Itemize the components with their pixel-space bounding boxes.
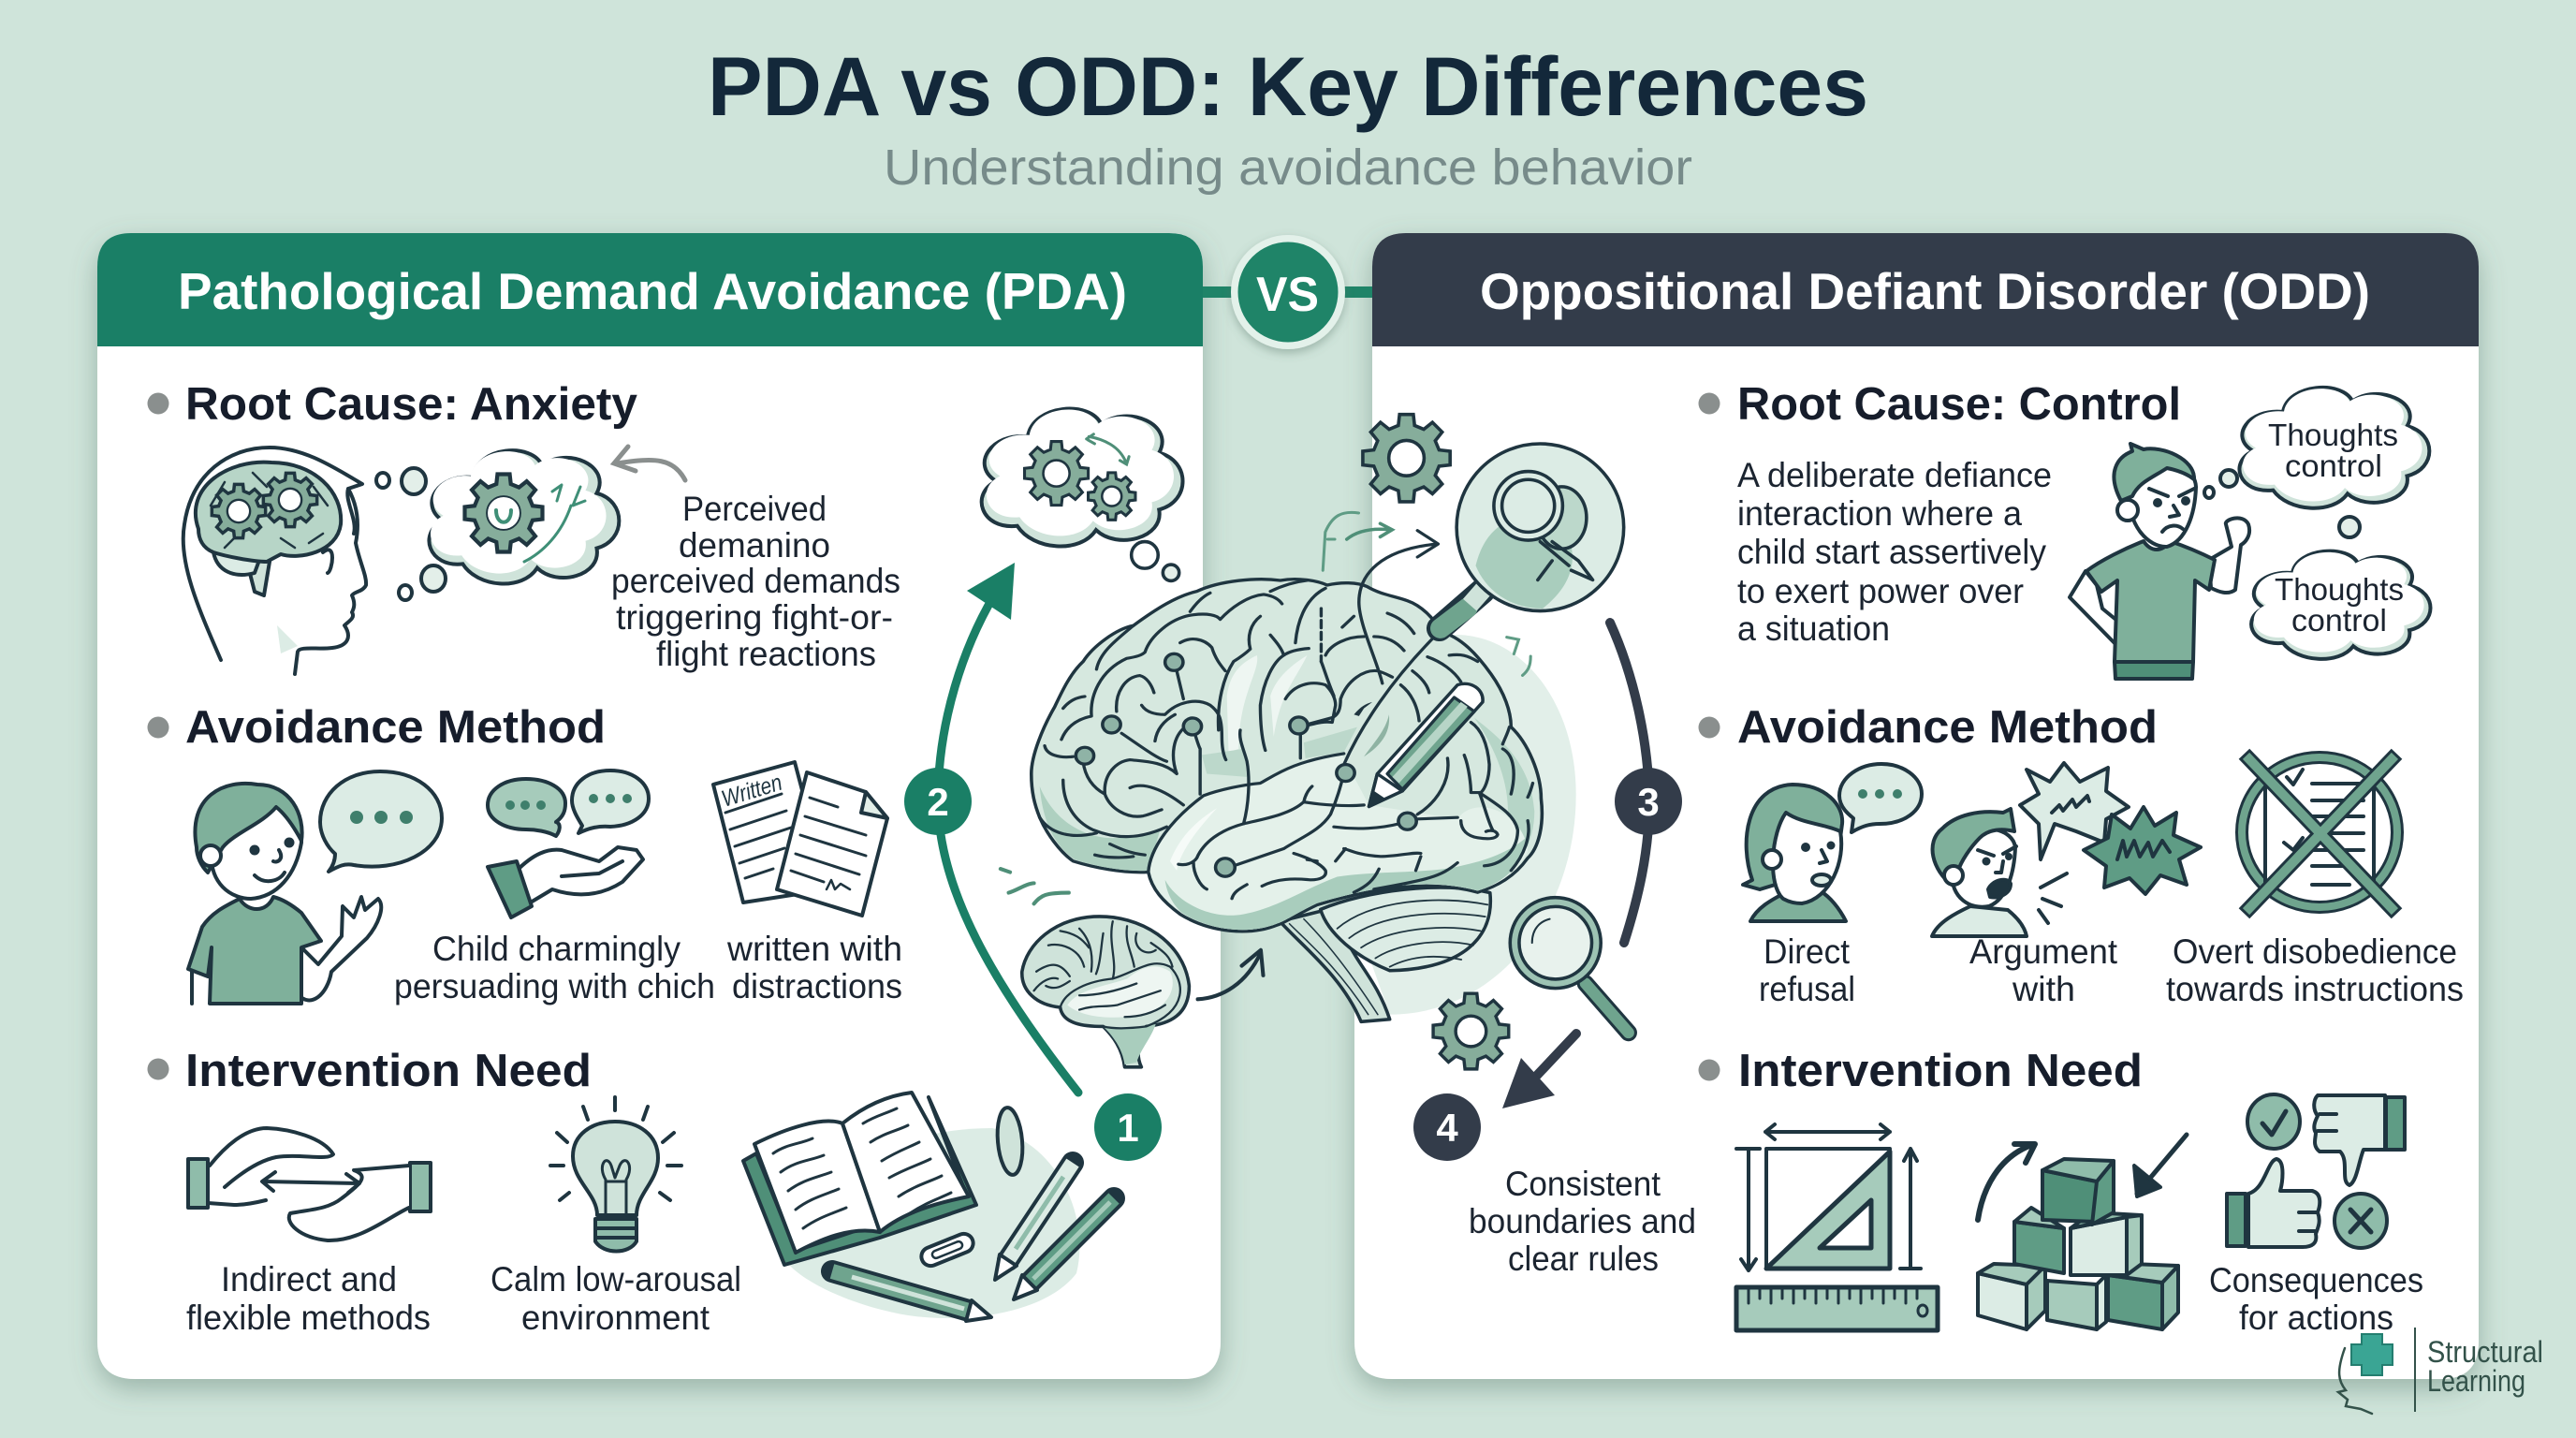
text: consistent boundaries: clear rules bbox=[1508, 1240, 1659, 1278]
text: consistent boundaries: boundaries and bbox=[1469, 1202, 1696, 1240]
text: perceived demands: perceived demands bbox=[611, 562, 900, 600]
text: perceived demands bbox=[611, 490, 900, 673]
text: perceived demands: demanino bbox=[679, 526, 830, 565]
step 4 badge bbox=[1413, 1093, 1481, 1161]
heading: avoidance method: Avoidance Method bbox=[185, 702, 606, 753]
text: deliberate defiance: A deliberate defiance bbox=[1737, 456, 2052, 494]
icon: thought cloud control top bbox=[2204, 388, 2429, 508]
text: perceived demands: triggering fight-or- bbox=[616, 598, 893, 637]
text: child charmingly persuading: persuading with chich bbox=[394, 967, 715, 1005]
step 2 badge: 2 bbox=[927, 780, 949, 824]
large magnifier bbox=[1435, 444, 1624, 628]
text: consequences for actions: for actions bbox=[2239, 1299, 2393, 1337]
icon: thought cloud control bottom: Thoughts bbox=[2275, 572, 2404, 607]
text: calm low-arousal bbox=[490, 1260, 741, 1337]
icon: angry boy with fist bbox=[2070, 444, 2249, 679]
small magnifier bbox=[1510, 898, 1629, 1033]
heading: intervention need ODD: Intervention Need bbox=[1738, 1046, 2143, 1096]
pale blob bbox=[1366, 635, 1576, 1015]
VS connector lines bbox=[1203, 286, 1372, 298]
text: written with distractions bbox=[726, 930, 902, 1005]
icon: set square and ruler bbox=[1736, 1124, 1938, 1330]
text: perceived demands: flight reactions bbox=[656, 635, 876, 673]
icon: head with brain gears bbox=[183, 448, 366, 674]
icon: smiling child bbox=[188, 784, 381, 1004]
text: consequences for actions: Consequences bbox=[2209, 1261, 2423, 1299]
text: deliberate defiance: interaction where a bbox=[1737, 494, 2022, 533]
heading: root cause anxiety: Root Cause: Anxiety bbox=[185, 379, 637, 430]
text: deliberate defiance: child start assertively bbox=[1737, 533, 2046, 571]
icon: light bulb bbox=[550, 1097, 681, 1251]
arrow: green arc 1 to 2 bbox=[938, 563, 1078, 1093]
central brain illustration bbox=[982, 409, 1629, 1069]
text: indirect and flexible bbox=[186, 1260, 431, 1337]
text: child charmingly persuading: Child charmingly bbox=[432, 930, 681, 968]
icon: thought cloud control bottom bbox=[2251, 517, 2430, 659]
icon: open book with pencils bbox=[743, 1093, 1114, 1321]
icon: written papers: Written bbox=[719, 770, 785, 813]
text: written with distractions: written with bbox=[726, 930, 902, 968]
text: argument with: Argument bbox=[1969, 932, 2118, 971]
VS badge bbox=[1231, 235, 1345, 349]
icon: thought cloud control top: control bbox=[2285, 448, 2382, 483]
icon: small speech bubble bbox=[1839, 764, 1922, 832]
lower gear bbox=[1433, 993, 1509, 1069]
green dashes left bbox=[1001, 869, 1069, 903]
icon: thought cloud control bottom: control bbox=[2291, 603, 2387, 638]
text: indirect and flexible: Indirect and bbox=[221, 1260, 397, 1299]
arrow: dark to step 4 bbox=[1502, 1034, 1576, 1108]
text: calm low-arousal: Calm low-arousal bbox=[490, 1260, 741, 1299]
text: overt disobedience: towards instructions bbox=[2166, 970, 2464, 1008]
text: overt disobedience: Overt disobedience bbox=[2173, 932, 2457, 971]
thought cloud with gears bbox=[982, 409, 1183, 580]
text: direct refusal: Direct bbox=[1764, 932, 1851, 971]
small brain bbox=[1022, 917, 1189, 1067]
heading: avoidance method ODD: Avoidance Method bbox=[1737, 702, 2158, 753]
icon: girl refusing bbox=[1743, 785, 1846, 921]
icon: argument bursts bbox=[2020, 763, 2201, 894]
subtitle: Understanding avoidance behavior bbox=[884, 139, 1692, 196]
PDA header bar bbox=[97, 233, 1203, 346]
step 4 badge: 4 bbox=[1436, 1106, 1458, 1150]
icon: consequences thumbs and marks bbox=[2227, 1094, 2405, 1248]
panel: ODD bbox=[1354, 233, 2479, 1379]
step 3 badge bbox=[1615, 768, 1682, 835]
icon: written papers bbox=[713, 762, 887, 916]
icon: stacked blocks with arrows bbox=[1978, 1135, 2187, 1329]
icon: speech bubble bbox=[320, 771, 442, 872]
text: deliberate defiance: to exert power over bbox=[1737, 572, 2024, 610]
arrow: grey pointer bbox=[614, 447, 685, 480]
brain stem and cerebellum bbox=[1280, 888, 1490, 1021]
main brain bbox=[1032, 531, 1542, 932]
VS badge: VS bbox=[1256, 268, 1319, 322]
icon: crossed-out document bbox=[2242, 757, 2397, 908]
step 2 badge bbox=[904, 768, 972, 835]
text: perceived demands: Perceived bbox=[682, 490, 827, 528]
text: direct refusal: refusal bbox=[1759, 970, 1855, 1008]
ODD header bar bbox=[1372, 233, 2479, 346]
icon: thought cloud control top: Thoughts bbox=[2268, 418, 2398, 452]
logo: Structural Learning bbox=[2338, 1328, 2543, 1414]
text: deliberate defiance bbox=[1737, 456, 2052, 648]
text: argument with: with bbox=[2012, 970, 2075, 1008]
text: deliberate defiance: a situation bbox=[1737, 609, 1890, 648]
heading: intervention need: Intervention Need bbox=[185, 1046, 592, 1096]
logo: Structural Learning: Structural bbox=[2427, 1335, 2543, 1369]
panel: PDA bbox=[97, 233, 1221, 1379]
text: child charmingly persuading bbox=[394, 930, 715, 1005]
step 3 badge: 3 bbox=[1637, 780, 1660, 824]
text: indirect and flexible: flexible methods bbox=[186, 1299, 431, 1337]
icon: persuading hand with bubbles bbox=[488, 770, 649, 917]
step 1 badge: 1 bbox=[1117, 1106, 1139, 1150]
heading: root cause control: Root Cause: Control bbox=[1737, 379, 2181, 430]
text: consistent boundaries bbox=[1469, 1165, 1696, 1278]
icon: two hands with arrow bbox=[188, 1128, 431, 1240]
text: consistent boundaries: Consistent bbox=[1505, 1165, 1661, 1203]
title: PDA vs ODD: Key Differences bbox=[708, 39, 1868, 133]
ODD header text: Oppositional Defiant Disorder (ODD) bbox=[1480, 262, 2370, 320]
PDA header text: Pathological Demand Avoidance (PDA) bbox=[178, 262, 1127, 320]
icon: arguing boy bbox=[1932, 809, 2067, 936]
logo: Structural Learning: Learning bbox=[2427, 1364, 2525, 1398]
top gear bbox=[1363, 415, 1450, 502]
step 1 badge bbox=[1094, 1093, 1162, 1161]
text: written with distractions: distractions bbox=[732, 967, 902, 1005]
decorative green dashes top bbox=[1323, 512, 1530, 675]
icon: thought cloud with gear bbox=[376, 450, 619, 600]
text: argument with bbox=[1969, 932, 2118, 1008]
text: overt disobedience bbox=[2166, 932, 2464, 1008]
text: calm low-arousal: environment bbox=[521, 1299, 710, 1337]
arrow small brain to big brain bbox=[1198, 950, 1263, 999]
pencil on brain bbox=[1368, 683, 1483, 807]
text: direct refusal bbox=[1759, 932, 1855, 1008]
text: consequences for actions bbox=[2209, 1261, 2423, 1337]
arrow: dark arc 3 bbox=[1610, 623, 1649, 943]
